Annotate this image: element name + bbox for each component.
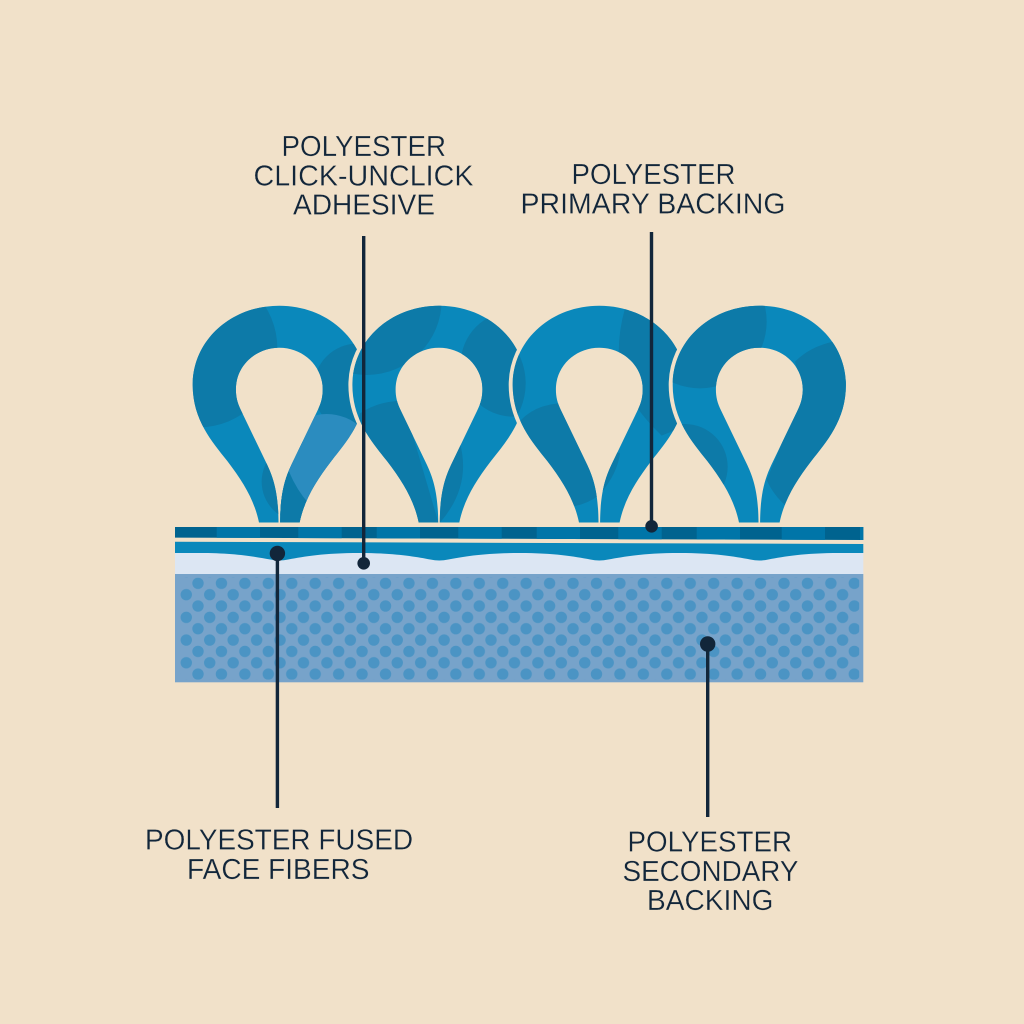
label: polyester click-unclick adhesive: CLICK-UNCLICK bbox=[254, 160, 474, 192]
fiber loop 4 bbox=[668, 306, 846, 522]
layer: primary backing bbox=[175, 527, 864, 541]
label: polyester click-unclick adhesive: POLYESTER bbox=[282, 131, 446, 163]
panel: carpet cross-section diagram bbox=[175, 306, 864, 682]
label: polyester fused face fibers: POLYESTER FUSED bbox=[145, 824, 413, 856]
label: polyester secondary backing: BACKING bbox=[647, 885, 774, 917]
label: polyester primary backing bbox=[520, 159, 786, 220]
layer: fused face fibers bbox=[175, 542, 863, 560]
label: polyester primary backing: PRIMARY BACKING bbox=[520, 188, 786, 220]
leader: secondary backing bbox=[700, 636, 715, 817]
leader: click-unclick adhesive bbox=[357, 236, 370, 570]
layer: polyester secondary backing bbox=[175, 574, 863, 682]
layer: adhesive bbox=[175, 548, 863, 574]
label: polyester fused face fibers bbox=[145, 824, 413, 886]
label: polyester click-unclick adhesive: ADHESIVE bbox=[293, 189, 435, 221]
label: polyester primary backing: POLYESTER bbox=[572, 159, 736, 191]
fiber loop 2 bbox=[348, 306, 517, 522]
label: polyester secondary backing: SECONDARY bbox=[622, 856, 798, 888]
label: polyester secondary backing: POLYESTER bbox=[628, 827, 792, 859]
leader: face fibers bbox=[270, 546, 285, 808]
label: polyester fused face fibers: FACE FIBERS bbox=[187, 854, 370, 886]
fiber loop 1 bbox=[192, 306, 357, 522]
label: polyester secondary backing bbox=[622, 827, 798, 917]
leader: primary backing bbox=[645, 232, 658, 533]
fiber loop 3 bbox=[508, 306, 677, 522]
label: polyester click-unclick adhesive bbox=[254, 131, 474, 221]
